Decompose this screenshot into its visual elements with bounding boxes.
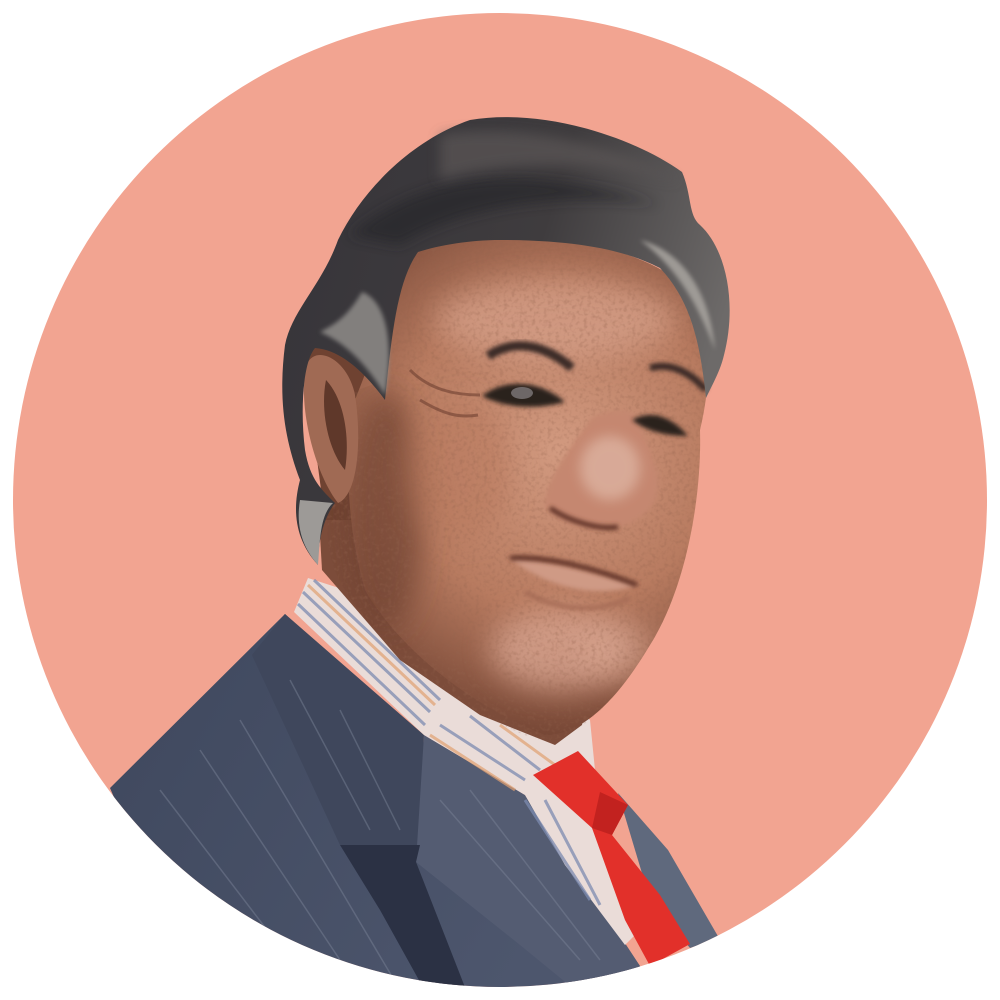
red tie [533,751,690,966]
shirt [294,578,640,945]
mouth [510,558,637,608]
suit jacket [110,614,719,1000]
face shading [300,220,720,750]
area behind ear [308,348,364,520]
face [348,235,708,735]
hair [282,117,730,565]
eyes and brows [410,346,706,436]
nose [545,410,659,528]
figure [110,117,730,1000]
neck [320,520,582,745]
ear [304,355,358,503]
